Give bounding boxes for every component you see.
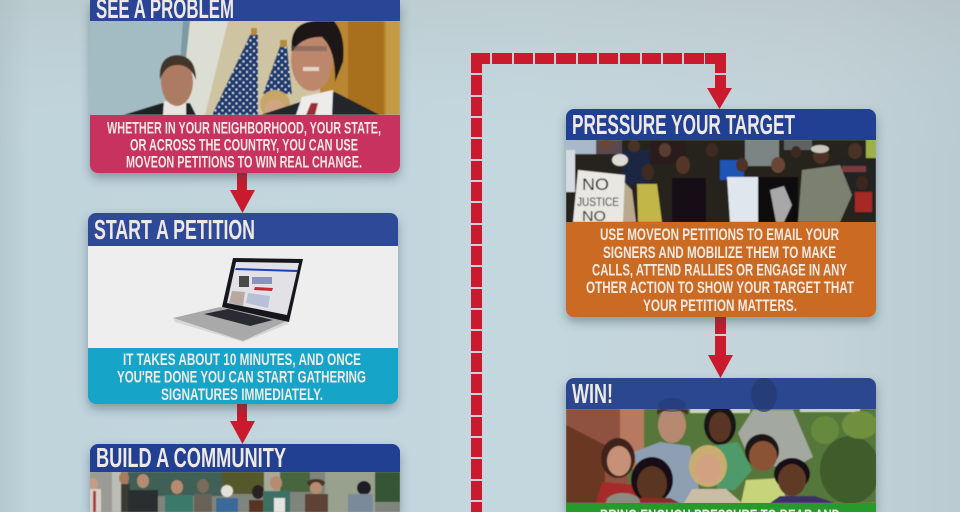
description: CALLS, ATTEND RALLIES OR ENGAGE IN ANY [592, 262, 847, 280]
description: WHETHER IN YOUR NEIGHBORHOOD, YOUR STATE, [107, 120, 381, 138]
header bar [90, 444, 400, 472]
description [586, 226, 854, 315]
description: OR ACROSS THE COUNTRY, YOU CAN USE [130, 136, 358, 154]
heading: BUILD A COMMUNITY [96, 442, 286, 473]
arrow: start a petition to build a community [230, 403, 255, 444]
heading: START A PETITION [94, 214, 255, 245]
photo: street rally crowd [88, 472, 400, 512]
arrow: dashed connector up and across to pressure your target [471, 53, 732, 512]
text panel [90, 115, 400, 173]
panel: pressure your target [566, 109, 876, 317]
panel: build a community [88, 442, 400, 512]
description: YOU'RE DONE YOU CAN START GATHERING [117, 368, 366, 386]
protest sign: NO [582, 208, 606, 225]
header bar [90, 0, 400, 21]
description: SIGNERS AND MOBILIZE THEM TO MAKE [603, 244, 836, 262]
description [117, 354, 366, 400]
heading: PRESSURE YOUR TARGET [572, 109, 795, 140]
panel: win [566, 378, 880, 512]
description [107, 122, 380, 168]
heading: WIN! [572, 378, 613, 409]
protest sign: NO [582, 175, 609, 194]
description: MOVEON PETITIONS TO WIN REAL CHANGE. [126, 154, 362, 172]
photo: smiling group [566, 405, 880, 511]
description: SIGNATURES IMMEDIATELY. [161, 386, 323, 404]
text panel [566, 222, 876, 317]
text panel [566, 503, 876, 512]
description: IT TAKES ABOUT 10 MINUTES, AND ONCE [123, 351, 361, 369]
panel: see a problem [90, 0, 400, 173]
image area [88, 246, 398, 349]
photo: rally crowd with sign [566, 139, 876, 225]
arrow: see a problem to start a petition [230, 172, 255, 213]
description: OTHER ACTION TO SHOW YOUR TARGET THAT [586, 279, 854, 297]
header bar [88, 213, 398, 246]
text panel [88, 348, 398, 404]
arrow: pressure your target to win [708, 316, 733, 378]
header bar [566, 109, 876, 140]
header bar [566, 378, 876, 409]
description: USE MOVEON PETITIONS TO EMAIL YOUR [600, 226, 839, 244]
protest sign: JUSTICE [577, 195, 619, 209]
panel: start a petition [88, 213, 398, 404]
description: YOUR PETITION MATTERS. [643, 297, 797, 315]
photo: two politicians and flags [90, 20, 400, 118]
protest sign [573, 170, 625, 225]
icon: laptop [173, 258, 303, 342]
